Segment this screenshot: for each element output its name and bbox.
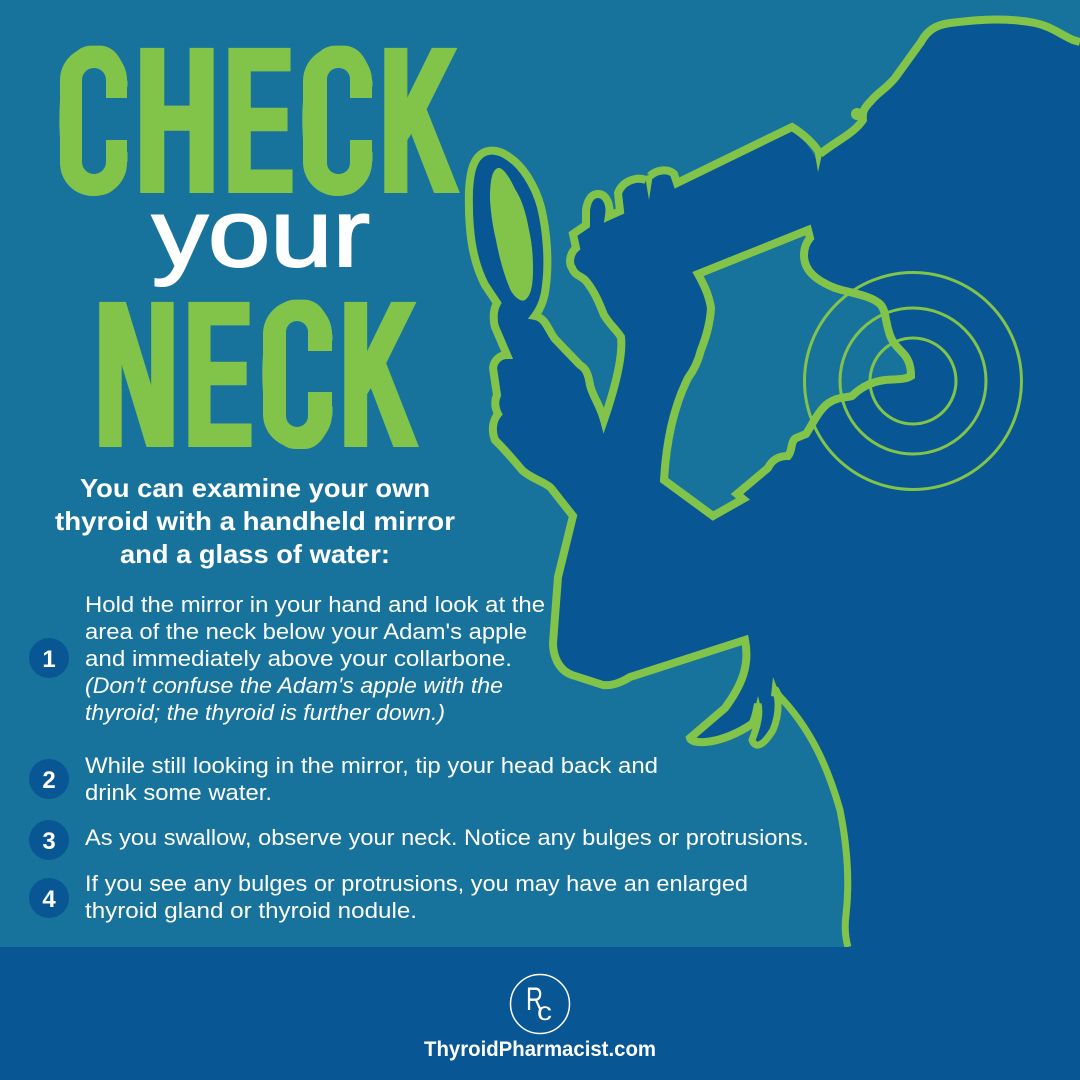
concentric target rings on thyroid (804, 272, 1022, 490)
title: your: your (152, 180, 370, 287)
step 2 badge: 2 (42, 767, 56, 794)
step 4 (29, 871, 748, 923)
title: CHECK (60, 2, 457, 239)
step 2 text: drink some water. (85, 780, 272, 805)
square terminals of the title C letters (60, 44, 380, 452)
step 3 (29, 820, 809, 860)
step 1 (29, 592, 545, 725)
title: NECK: K (341, 258, 416, 493)
step 1 text: area of the neck below your Adam's apple (85, 619, 527, 644)
logo: RC monogram: R (526, 981, 543, 1017)
step 2 text: While still looking in the mirror, tip your head back and (85, 753, 658, 778)
intro heading: and a glass of water: (120, 539, 390, 569)
step 3 text: As you swallow, observe your neck. Notice any bulges or protrusions. (85, 825, 809, 850)
title: CHECK: H (137, 2, 217, 238)
silhouette fill and outline (469, 20, 1080, 947)
title: CHECK: E (226, 3, 292, 238)
title: NECK: E (186, 256, 251, 492)
step 1 badge (29, 638, 69, 678)
step 1 text (85, 592, 545, 725)
step 2 badge (29, 759, 69, 799)
mirror glass (490, 168, 533, 301)
intro heading (55, 473, 455, 569)
logo: RC monogram: c (537, 996, 552, 1026)
step 2 (29, 753, 658, 805)
step 1 badge: 1 (42, 646, 56, 673)
step 1 text: and immediately above your collarbone. (85, 646, 512, 671)
website address: ThyroidPharmacist.com (424, 1038, 656, 1061)
intro heading: You can examine your own (80, 473, 430, 503)
step 4 badge: 4 (42, 886, 56, 913)
step 3 badge (29, 820, 69, 860)
step 4 badge (29, 878, 69, 918)
title: CHECK: C (302, 2, 373, 238)
title: NECK: C (262, 256, 333, 492)
logo: RC monogram (510, 974, 570, 1034)
title: NECK (96, 256, 416, 493)
title: CHECK: K (381, 3, 457, 239)
gap between arm and neck (664, 230, 911, 516)
illustration: person silhouette checking neck with mirror (469, 20, 1080, 947)
outline spikes and ear knob (645, 108, 863, 712)
intro heading: thyroid with a handheld mirror (55, 506, 455, 536)
step 1 text: Hold the mirror in your hand and look at the (85, 592, 545, 617)
title: CHECK: C (60, 2, 128, 238)
step 3 badge: 3 (42, 828, 56, 855)
step 1 text: (Don't confuse the Adam's apple with the (85, 673, 503, 698)
step 4 text (85, 871, 748, 923)
step 2 text (85, 753, 658, 805)
title: NECK: N (96, 256, 177, 492)
step 1 text: thyroid; the thyroid is further down.) (85, 700, 445, 725)
footer band (0, 947, 1080, 1080)
step 4 text: thyroid gland or thyroid nodule. (85, 898, 417, 923)
step 4 text: If you see any bulges or protrusions, you may have an enlarged (85, 871, 748, 896)
